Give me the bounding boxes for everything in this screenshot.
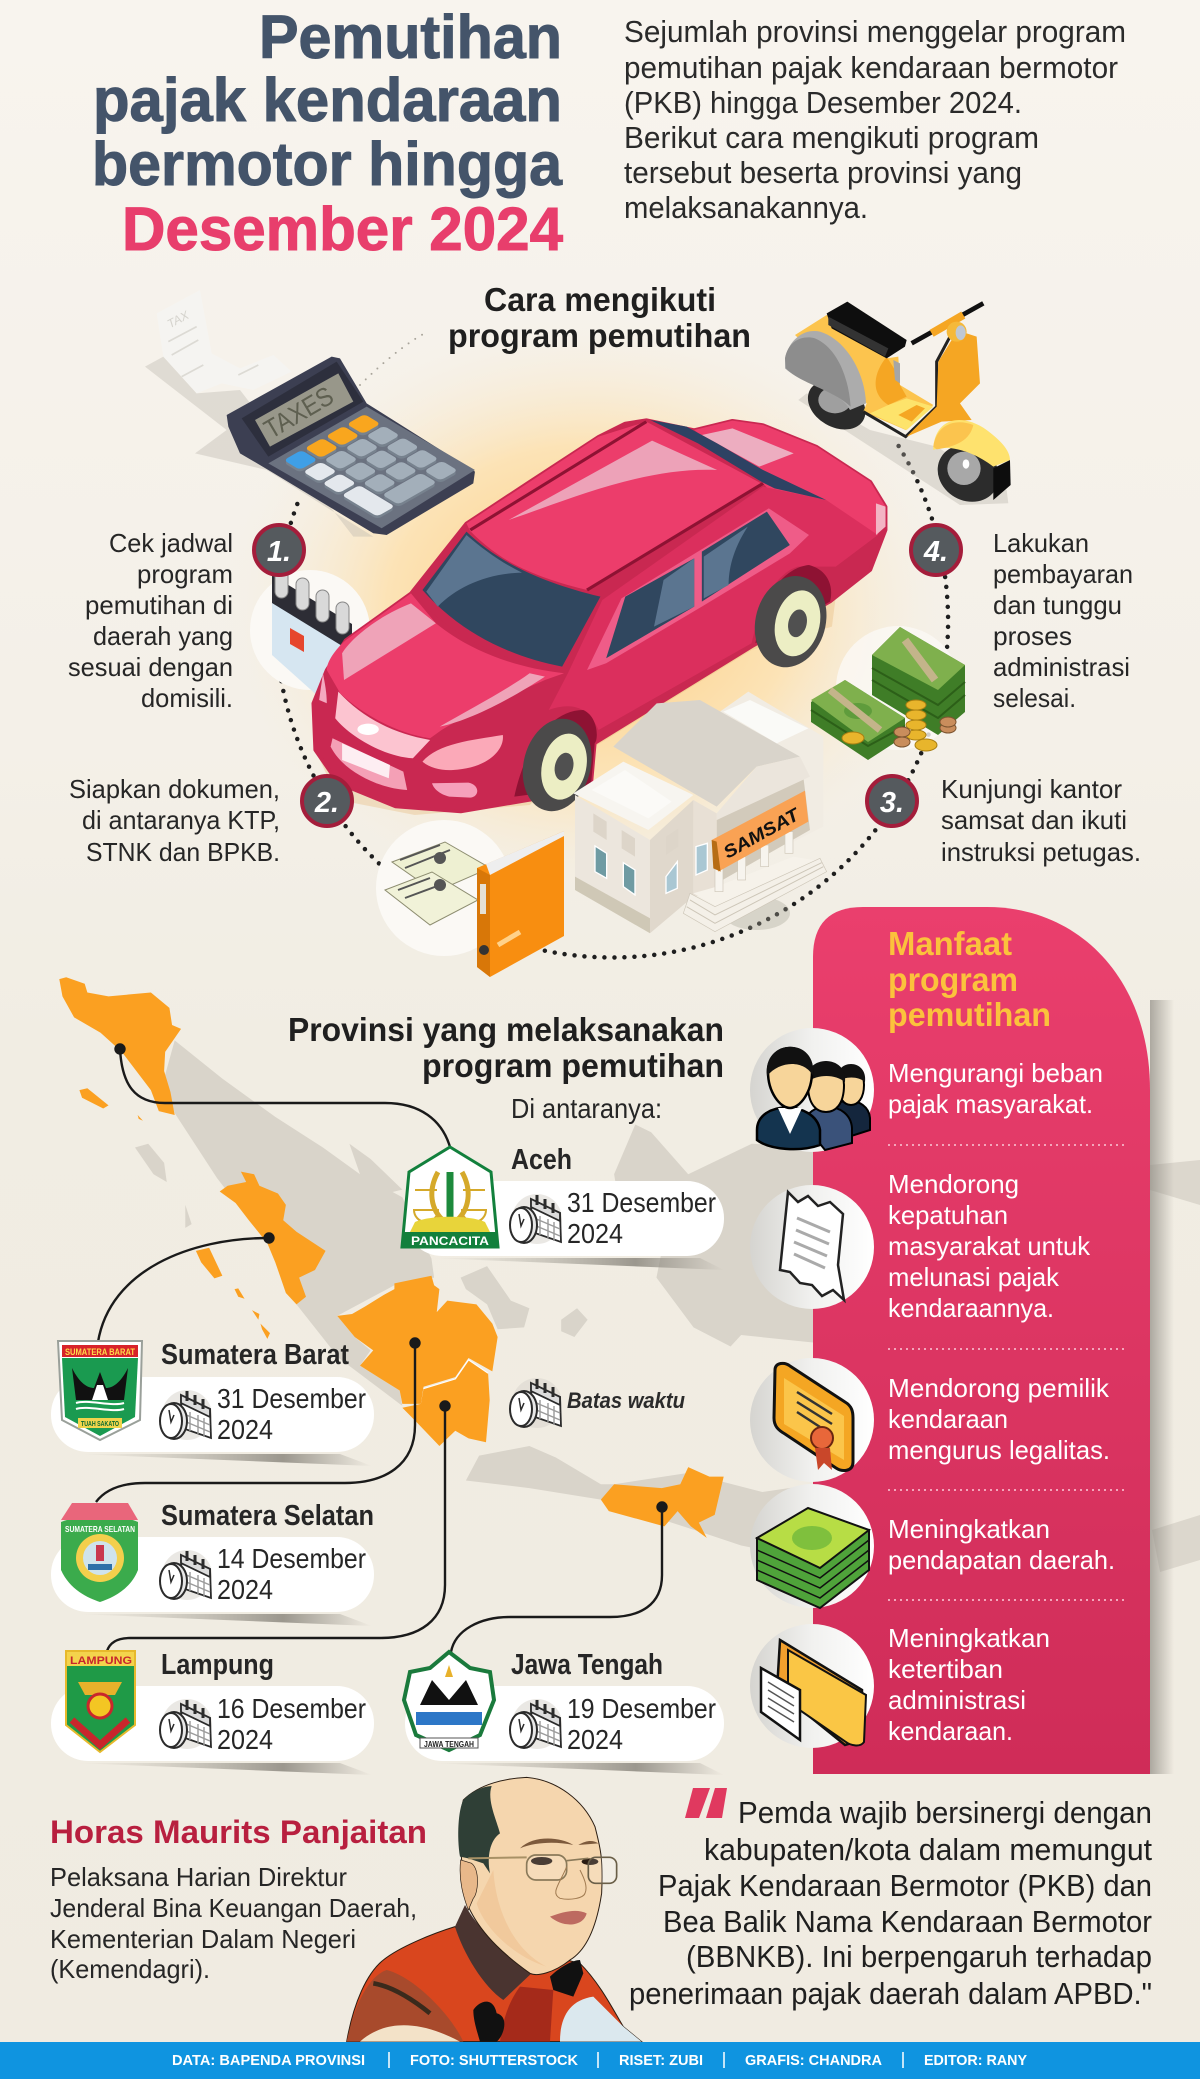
logo: Lampung [66,1651,135,1752]
step 4 text: administrasi [993,652,1130,682]
benefit 2 text [888,1169,1091,1323]
province card: Sumatera Barat: 2024 [217,1414,273,1445]
icon: receipt and calculator [145,290,475,537]
quote: penerimaan pajak daerah dalam APBD." [629,1976,1152,2011]
benefit 1 text: Mengurangi beban [888,1058,1103,1088]
icon: calendar [250,566,370,698]
wheel: rear [747,571,834,672]
footer bar: GRAFIS: CHANDRA [745,2052,882,2069]
legend: deadline: Batas waktu [567,1388,686,1413]
step badges [254,525,961,826]
heading: steps: program pemutihan [448,317,751,354]
step 3 text [941,774,1141,867]
province card: Aceh: Aceh [511,1144,572,1176]
panel heading: program [888,961,1018,998]
illustration: samsat building [573,692,827,933]
icon: folder [750,1624,874,1748]
logo: Jawa Tengah [404,1652,494,1750]
intro text [624,14,1126,225]
step 1 text: daerah yang [93,621,233,651]
title: Desember 2024 [122,195,563,263]
logo: Sumatera Selatan: SUMATERA SELATAN [65,1524,135,1534]
intro text: pemutihan pajak kendaraan bermotor [624,50,1118,85]
province card: Jawa Tengah: 2024 [567,1724,623,1755]
province card: Lampung: 16 Desember [217,1693,366,1724]
benefit 5 text [888,1623,1050,1746]
icon: documents [376,820,512,956]
wheel: front [515,714,600,816]
benefit 1 text [888,1058,1103,1119]
benefit 2 text: melunasi pajak [888,1262,1060,1292]
map: grey islands [135,1040,815,1560]
icon: certificate [750,1358,874,1482]
title: bermotor hingga [92,130,563,198]
step 4 text: Lakukan [993,528,1089,558]
title [92,3,563,263]
province card: Sumatera Selatan: Sumatera Selatan [161,1500,374,1532]
province card: Jawa Tengah [404,1649,724,1775]
map: far-east islands [1150,1160,1200,1572]
icon: money [811,626,965,760]
footer bar: EDITOR: RANY [924,2052,1027,2069]
panel heading: pemutihan [888,996,1051,1033]
benefit 3 text: Mendorong pemilik [888,1373,1110,1403]
subheading: Di antaranya: [511,1093,662,1124]
logo: Sumatera Barat: SUMATERA BARAT [65,1347,135,1357]
province card: Jawa Tengah: Jawa Tengah [511,1649,663,1681]
quote mark [685,1788,727,1818]
map connector lines [96,1044,666,1652]
step 2 text: Siapkan dokumen, [69,774,280,804]
intro text: melaksanakannya. [624,190,868,225]
official description [50,1862,417,1984]
quote: (BBNKB). Ini berpengaruh terhadap [686,1939,1152,1974]
step numbers: 3. [880,787,904,819]
province card: Lampung: 2024 [217,1724,273,1755]
footer bar: FOTO: SHUTTERSTOCK [410,2052,578,2069]
step 3 text: instruksi petugas. [941,837,1141,867]
benefit 2 text: kendaraannya. [888,1293,1054,1323]
benefit 4 text [888,1514,1115,1575]
step 3 text: Kunjungi kantor [941,774,1122,804]
benefit 5 text: ketertiban [888,1654,1003,1684]
logo: Sumatera Barat: TUAH SAKATO [81,1421,119,1428]
quote: Bea Balik Nama Kendaraan Bermotor [663,1904,1152,1939]
step 1 text: pemutihan di [85,590,233,620]
official description: (Kemendagri). [50,1954,210,1984]
step 1 text: domisili. [141,683,233,713]
panel: benefits [813,907,1174,1774]
province card: Lampung: Lampung [161,1649,274,1681]
official name: Horas Maurits Panjaitan [50,1814,427,1850]
dotted step ring [276,333,948,958]
province card: Aceh: 31 Desember [567,1187,716,1218]
province card: Aceh [402,1144,724,1270]
heading: steps [448,281,751,354]
step numbers: 1. [267,536,291,568]
footer bar: DATA: BAPENDA PROVINSI [172,2052,365,2069]
step numbers [267,536,948,819]
intro text: (PKB) hingga Desember 2024. [624,85,1022,120]
benefit 5 text: Meningkatkan [888,1623,1050,1653]
icon: binder folder [477,831,564,977]
heading: provinces: Provinsi yang melaksanakan [288,1011,724,1048]
province card: Sumatera Barat: 31 Desember [217,1383,366,1414]
step 1 text: program [137,559,233,589]
quote: Pajak Kendaraan Bermotor (PKB) dan [658,1868,1152,1903]
car glow [220,310,960,910]
step 1 text [68,528,233,713]
step 4 text: dan tunggu [993,590,1122,620]
province card: Sumatera Selatan [51,1500,374,1626]
step 2 text: di antaranya KTP, [82,805,280,835]
footer bar [0,2042,1200,2079]
step 4 text: proses [993,621,1072,651]
footer bar: RISET: ZUBI [619,2052,703,2069]
heading: steps: Cara mengikuti [484,281,716,318]
label: samsat sign [712,791,808,872]
icon: receipt and calculator: TAXES [259,381,339,444]
legend: deadline [510,1378,686,1428]
benefit 3 text: mengurus legalitas. [888,1435,1110,1465]
icon: cash stack [750,1484,874,1608]
benefit 2 text: Mendorong [888,1169,1019,1199]
title: Pemutihan [259,3,562,71]
logo: Lampung: LAMPUNG [70,1655,132,1667]
heading: provinces: program pemutihan [422,1047,724,1084]
step 1 text: Cek jadwal [109,528,233,558]
benefit 1 text: pajak masyarakat. [888,1089,1093,1119]
step 3 text: samsat dan ikuti [941,805,1127,835]
province card: Sumatera Barat: Sumatera Barat [161,1339,349,1371]
intro text: Sejumlah provinsi menggelar program [624,14,1126,49]
benefit 4 text: Meningkatkan [888,1514,1050,1544]
step 2 text [69,774,280,867]
panel heading: Manfaat [888,925,1012,962]
quote [629,1795,1152,2011]
province card: Sumatera Selatan: 14 Desember [217,1543,366,1574]
benefit 2 text: masyarakat untuk [888,1231,1091,1261]
logo: Sumatera Selatan [61,1503,138,1602]
title: pajak kendaraan [93,66,562,134]
illustration: red car [313,420,886,816]
map: highlighted provinces [59,977,724,1538]
panel heading [888,925,1051,1033]
province card: Aceh: 2024 [567,1218,623,1249]
step 4 text [993,528,1133,713]
province card: Jawa Tengah: 19 Desember [567,1693,716,1724]
quote: Pemda wajib bersinergi dengan [738,1795,1152,1830]
label: samsat sign: SAMSAT [720,804,804,862]
logo: Sumatera Barat [58,1341,142,1440]
intro text: tersebut beserta provinsi yang [624,155,1022,190]
step numbers: 4. [923,536,948,568]
portrait [347,1777,642,2042]
benefit 5 text: kendaraan. [888,1716,1013,1746]
benefit 4 text: pendapatan daerah. [888,1545,1115,1575]
benefit 2 text: kepatuhan [888,1200,1008,1230]
official description: Pelaksana Harian Direktur [50,1862,347,1892]
step 4 text: selesai. [993,683,1076,713]
official description: Kementerian Dalam Negeri [50,1924,356,1954]
icon: receipt and calculator: TAX [165,308,192,331]
benefit 3 text: kendaraan [888,1404,1008,1434]
step 2 text: STNK dan BPKB. [86,837,280,867]
benefit 3 text [888,1373,1110,1465]
heading: provinces [288,1011,724,1084]
step 4 text: pembayaran [993,559,1133,589]
logo: Aceh [402,1147,498,1248]
icon: receipt [750,1185,874,1309]
intro text: Berikut cara mengikuti program [624,120,1039,155]
logo: Aceh: PANCACITA [411,1234,489,1248]
province card: Sumatera Selatan: 2024 [217,1574,273,1605]
province card: Lampung [51,1649,374,1775]
quote: kabupaten/kota dalam memungut [704,1832,1152,1867]
step 1 text: sesuai dengan [68,652,233,682]
icon: people [750,1028,874,1152]
icon: scooter [785,302,1011,513]
step numbers: 2. [314,787,339,819]
logo: Jawa Tengah: JAWA TENGAH [424,1740,474,1749]
official description: Jenderal Bina Keuangan Daerah, [50,1893,417,1923]
province card: Sumatera Barat [51,1339,374,1466]
benefit 5 text: administrasi [888,1685,1026,1715]
